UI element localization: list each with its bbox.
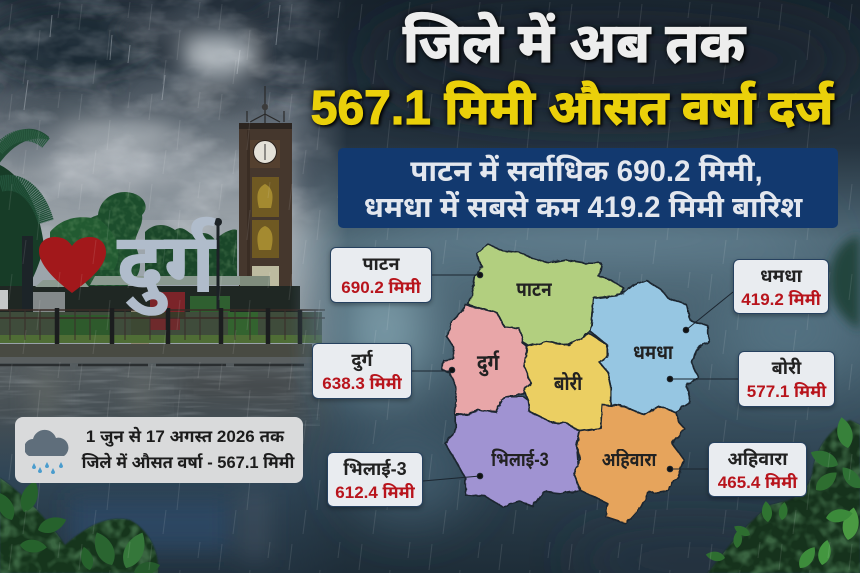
clouds (0, 3, 345, 290)
tree far right (830, 235, 860, 330)
map label: Bhilai-3: भिलाई-3 (491, 450, 549, 471)
title line 2: 567.1 मिमी औसत वर्षा दर्ज (311, 82, 833, 135)
region: Ahiwara (574, 405, 684, 523)
callout: Durg: 638.3 मिमी (322, 374, 402, 393)
map label: Patan: पाटन (516, 279, 552, 301)
callout: Patan (330, 247, 432, 303)
callout: Bori (738, 351, 835, 407)
leader lines and dots (412, 272, 738, 481)
map label: Ahiwara: अहिवारा (602, 450, 656, 471)
durg sculpture plinth (131, 310, 149, 344)
info line 1: 1 जुन से 17 अगस्त 2026 तक (86, 427, 284, 446)
right side atmosphere (290, 0, 860, 573)
map label: Dhamdha: धमधा (633, 342, 673, 364)
region: Bori (523, 333, 611, 431)
callout: Durg: दुर्ग (351, 350, 373, 370)
foliage bottom right (705, 415, 860, 573)
callout: Ahiwara: 465.4 मिमी (718, 473, 797, 492)
trees (50, 192, 237, 286)
callout: Patan: पाटन (362, 254, 400, 274)
region: Bhilai-3 (445, 397, 580, 507)
subtitle panel (338, 148, 838, 228)
sculpture text: durg: दुर्ग (116, 216, 216, 310)
callout: Durg (312, 343, 412, 399)
info panel (15, 417, 303, 483)
subtitle line 1: पाटन में सर्वाधिक 690.2 मिमी, (410, 155, 763, 188)
icon: heart sculpture (39, 237, 106, 293)
ledge (0, 344, 312, 357)
map label: Bori: बोरी (554, 373, 582, 395)
region: Durg (442, 305, 531, 416)
title line 1: जिले में अब तक (403, 12, 745, 74)
foliage bottom left (0, 478, 160, 573)
region: Patan (469, 245, 624, 347)
callout: Dhamdha (733, 259, 829, 314)
callout: Patan: 690.2 मिमी (341, 278, 421, 297)
map label: Durg: दुर्ग (477, 350, 499, 375)
callout: Bhilai-3 (327, 452, 423, 507)
region: Dhamdha (590, 280, 709, 415)
palm (0, 130, 48, 292)
railing fence (0, 308, 325, 344)
callout: Bhilai-3: भिलाई-3 (343, 459, 407, 479)
subtitle line 2: धमधा में सबसे कम 419.2 मिमी बारिश (364, 192, 802, 224)
clock tower (239, 86, 292, 310)
callout: Dhamdha: धमधा (760, 266, 802, 286)
icon: rain cloud (25, 430, 68, 474)
callout: Ahiwara (708, 442, 807, 497)
water (0, 360, 430, 573)
callout: Bori: बोरी (772, 358, 801, 378)
callout: Bhilai-3: 612.4 मिमी (335, 483, 415, 502)
info line 2: जिले में औसत वर्षा - 567.1 मिमी (82, 454, 294, 472)
building roof and sign backdrop (0, 218, 300, 317)
callout: Ahiwara: अहिवारा (727, 449, 788, 469)
callout: Bori: 577.1 मिमी (747, 382, 826, 401)
callout: Dhamdha: 419.2 मिमी (741, 290, 821, 309)
